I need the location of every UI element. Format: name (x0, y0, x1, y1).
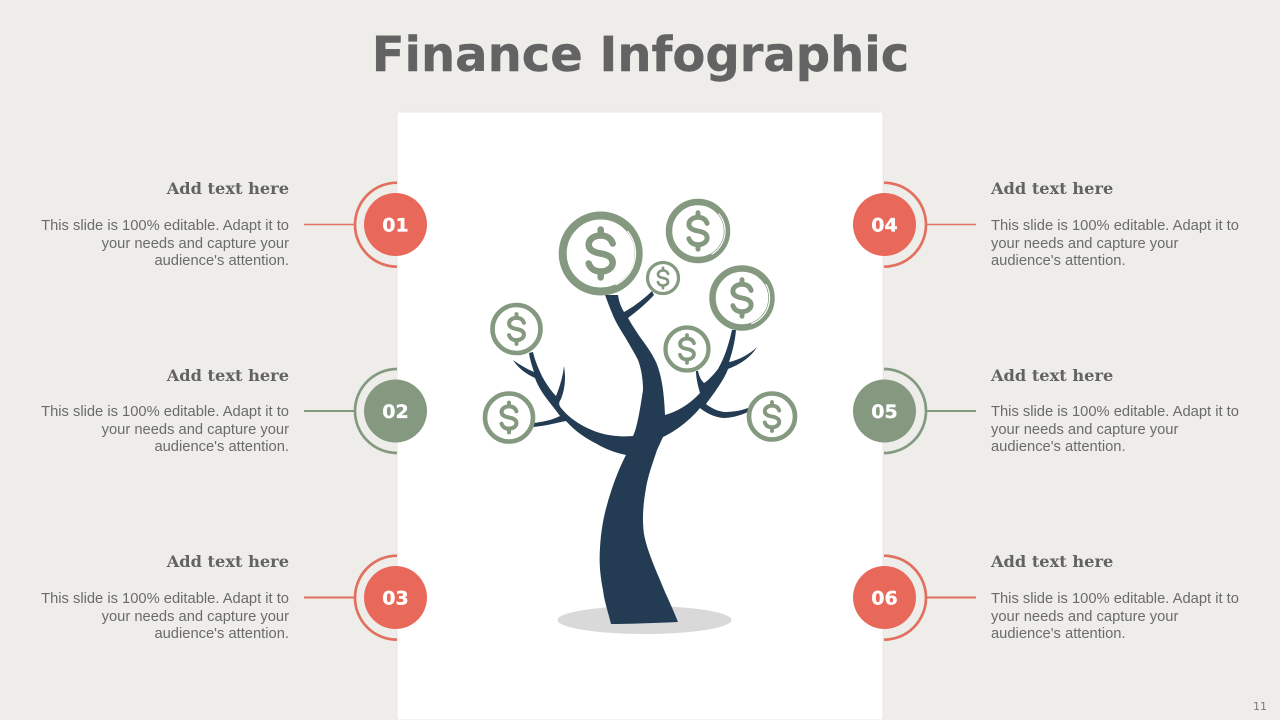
badge 06: 06 (871, 588, 898, 610)
body 04: audience's attention. (991, 253, 1126, 269)
tree illustration (485, 202, 795, 634)
item 04 (853, 179, 1239, 269)
item 02 (41, 366, 427, 455)
item 03 (41, 552, 427, 642)
coin: top centre (669, 202, 727, 260)
coin: left upper (492, 305, 540, 353)
badge 01: 01 (382, 214, 409, 236)
body 03: audience's attention. (154, 626, 289, 642)
ground shadow (558, 606, 732, 634)
title: Finance Infographic (372, 27, 909, 83)
body 02: audience's attention. (154, 439, 289, 455)
body 06: audience's attention. (991, 626, 1126, 642)
badge 04: 04 (871, 214, 898, 236)
badge 03 (304, 556, 427, 640)
badge 04 (853, 183, 976, 267)
badge 02 (304, 369, 427, 453)
coin: large top left (563, 216, 639, 292)
coin: middle (666, 328, 708, 370)
panel: central white card (397, 112, 883, 720)
body 01: This slide is 100% editable. Adapt it to (41, 218, 289, 234)
item 06 (853, 552, 1239, 642)
body 05: your needs and capture your (991, 422, 1178, 438)
page number: 11 (1253, 700, 1267, 713)
body 06: your needs and capture your (991, 609, 1178, 625)
heading 01: Add text here (166, 179, 289, 198)
heading 05: Add text here (990, 366, 1113, 385)
heading 06: Add text here (990, 552, 1113, 571)
coin: right lower (749, 394, 795, 440)
heading 03: Add text here (166, 552, 289, 571)
item 01 (41, 179, 427, 269)
badge 05: 05 (871, 401, 898, 423)
heading 04: Add text here (990, 179, 1113, 198)
body 04: This slide is 100% editable. Adapt it to (991, 218, 1239, 234)
tree trunk and branches (513, 291, 757, 624)
body 05: This slide is 100% editable. Adapt it to (991, 404, 1239, 420)
body 04: your needs and capture your (991, 236, 1178, 252)
item 05 (853, 366, 1239, 455)
badge 01 (304, 183, 427, 267)
coin: left lower (485, 394, 533, 442)
body 03: This slide is 100% editable. Adapt it to (41, 591, 289, 607)
body 02: This slide is 100% editable. Adapt it to (41, 404, 289, 420)
body 06: This slide is 100% editable. Adapt it to (991, 591, 1239, 607)
coin: small (648, 262, 678, 294)
badge 03: 03 (382, 588, 409, 610)
body 01: audience's attention. (154, 253, 289, 269)
badge 05 (853, 369, 976, 453)
body 03: your needs and capture your (102, 609, 289, 625)
coin: right (712, 268, 772, 328)
body 05: audience's attention. (991, 439, 1126, 455)
heading 02: Add text here (166, 366, 289, 385)
badge 02: 02 (382, 401, 409, 423)
body 02: your needs and capture your (102, 422, 289, 438)
body 01: your needs and capture your (102, 236, 289, 252)
badge 06 (853, 556, 976, 640)
